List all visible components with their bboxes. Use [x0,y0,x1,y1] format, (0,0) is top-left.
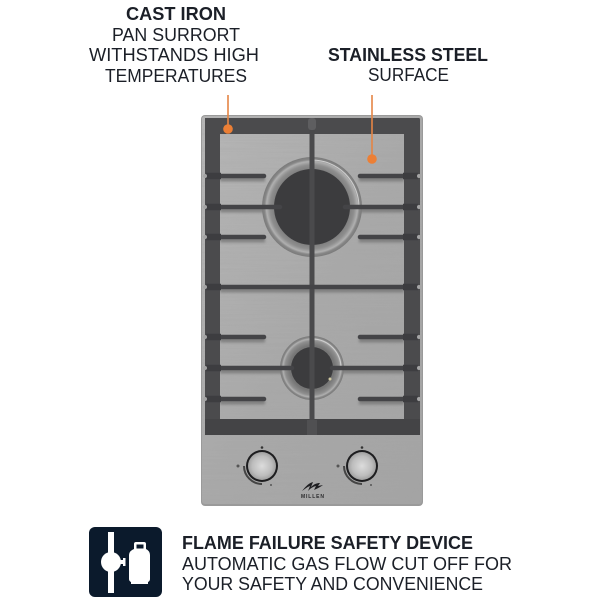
gas hob product [201,115,423,506]
small burner [280,336,344,400]
text: flame failure safety device [182,533,512,594]
heading: cast iron callout: CAST IRON [126,4,226,24]
pan support shadow [220,179,404,402]
steel surface [201,115,423,506]
heading: cast iron callout [89,4,259,86]
text: flame failure safety device: FLAME FAILURE SAFETY DEVICE [182,533,473,553]
text: flame failure safety device: YOUR SAFETY AND CONVENIENCE [182,574,483,594]
text: flame failure safety device: AUTOMATIC GAS FLOW CUT OFF FOR [182,554,512,574]
Millen logo: MILLEN [301,494,324,500]
heading: cast iron callout: WITHSTANDS HIGH [89,45,259,65]
heading: stainless steel callout: STAINLESS STEEL [328,45,488,65]
heading: stainless steel callout: SURFACE [368,65,449,85]
large burner [262,157,362,257]
icon: gas valve and cylinder [89,527,162,597]
heading: stainless steel callout [328,45,488,85]
Millen logo [301,482,324,500]
heading: cast iron callout: TEMPERATURES [105,66,247,86]
heading: cast iron callout: PAN SURRORT [112,25,240,45]
left control knob [236,446,278,486]
callout pointer: cast iron [223,95,233,134]
cast iron pan support [203,118,421,435]
right control knob [336,446,378,486]
callout pointer: stainless steel [367,95,377,164]
